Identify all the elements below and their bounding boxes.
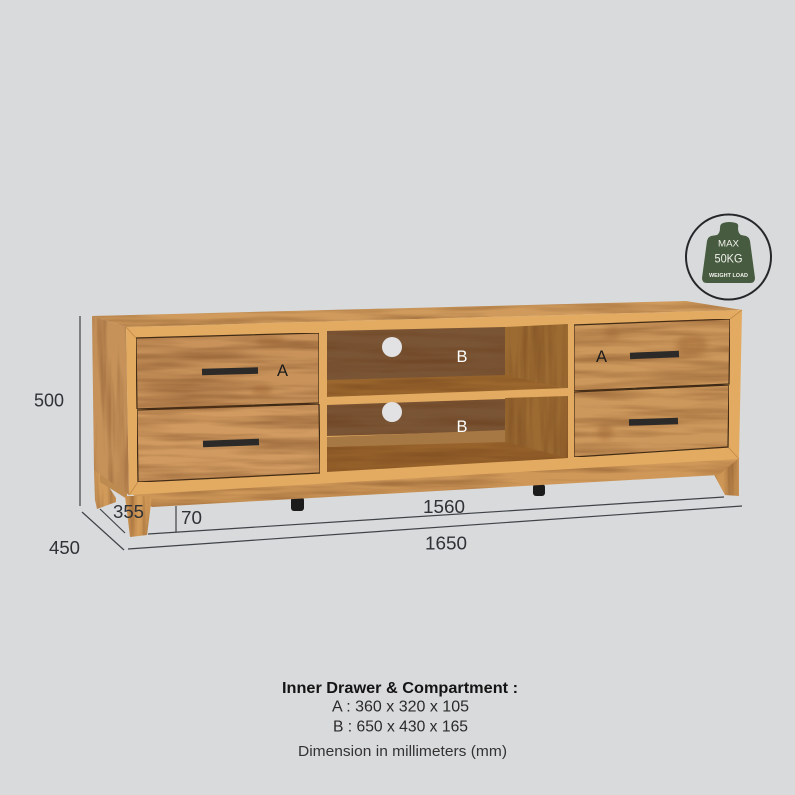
badge ring (686, 214, 771, 300)
shelf front edge (327, 388, 568, 405)
dimension labels: 70 (181, 507, 202, 528)
dimension labels: 1560 (423, 496, 465, 517)
right upper drawer (574, 319, 730, 391)
lower right inner wall (505, 396, 568, 458)
left side apron (100, 473, 127, 499)
left lower drawer (137, 404, 320, 482)
lower rail (327, 430, 505, 447)
cable hole upper (382, 337, 402, 357)
left upper drawer (136, 333, 319, 409)
dimension lines (80, 316, 742, 550)
label B lower: B (456, 418, 468, 436)
upper shelf surface (327, 375, 567, 397)
apron under the cabinet (130, 458, 739, 507)
size B: B : 650 x 430 x 165 (333, 718, 468, 736)
front-left leg (125, 496, 152, 537)
centre compartment (327, 324, 568, 472)
weight text: 50KG (714, 252, 742, 266)
weight text (709, 238, 748, 279)
dimension labels: 355 (113, 501, 144, 522)
cable hole lower (382, 402, 402, 422)
cabinet left side (92, 316, 129, 495)
notes heading: Inner Drawer & Compartment : (282, 680, 518, 697)
label A left: A (277, 362, 288, 380)
frame mitre corners (126, 310, 742, 495)
right leg (712, 458, 739, 496)
inner drawer and compartment notes (282, 680, 518, 760)
weight text: MAX (718, 238, 739, 248)
black center feet (291, 484, 545, 511)
lower back wall (327, 399, 505, 436)
dimension labels (34, 390, 467, 558)
weight text: WEIGHT LOAD (709, 273, 748, 279)
size A: A : 360 x 320 x 105 (332, 698, 469, 716)
wood knots (252, 328, 708, 440)
upper back wall (327, 327, 505, 381)
upper right inner wall (505, 324, 568, 389)
dimension labels: 450 (49, 537, 80, 558)
front frame (126, 310, 742, 495)
dimension labels: 1650 (425, 532, 467, 554)
unit note: Dimension in millimeters (mm) (298, 744, 507, 760)
cabinet top surface (92, 301, 742, 327)
weight icon (702, 222, 755, 283)
drawer handles (202, 354, 679, 444)
weight load badge (686, 214, 771, 300)
back left leg (94, 470, 116, 509)
dimension labels: 500 (34, 390, 64, 410)
lower floor (327, 442, 568, 472)
right lower drawer (574, 385, 729, 457)
label B upper: B (456, 348, 468, 366)
TV cabinet (92, 301, 742, 537)
label A right: A (596, 348, 607, 366)
